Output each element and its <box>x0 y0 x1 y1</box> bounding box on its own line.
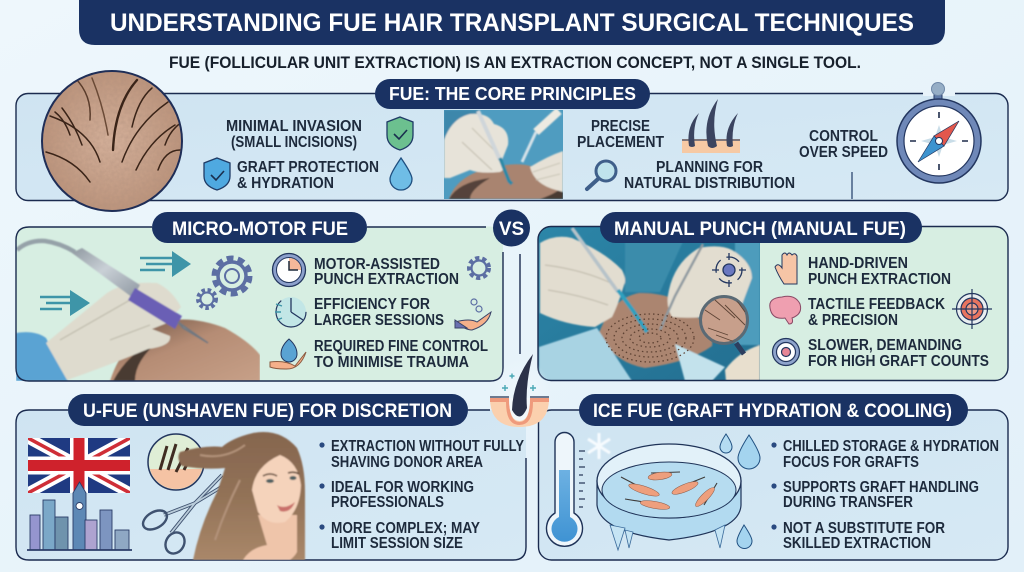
icon: green shield <box>387 117 413 150</box>
heading pill: U-FUE <box>68 394 468 426</box>
icon: magnifier on scalp <box>700 296 748 354</box>
icon: central hair follicle <box>490 354 552 431</box>
text: efficiency: LARGER SESSIONS <box>314 312 444 329</box>
panel: FUE core principles <box>16 71 1008 211</box>
heading pill: manual punch <box>600 212 922 243</box>
gap for stopwatch crown <box>923 91 955 96</box>
icon: large water drop <box>738 435 760 469</box>
text: precise placement: PRECISE <box>591 118 650 135</box>
versus badge: VS <box>499 219 524 240</box>
text list: U-FUE benefits <box>319 438 525 552</box>
icon: brain <box>770 296 801 324</box>
icon: thermometer <box>546 433 585 546</box>
panel: micro-motor FUE <box>16 212 503 381</box>
photo: micro-motor handpiece in gloved hand <box>16 241 260 381</box>
icon: blue shield <box>204 158 230 190</box>
icon: petri dish with grafts <box>597 444 741 550</box>
text: graft protection: GRAFT PROTECTION <box>237 159 379 176</box>
text: precise placement <box>577 118 664 151</box>
heading pill: manual punch: MANUAL PUNCH (MANUAL FUE) <box>614 219 906 240</box>
text list: ICE FUE notes: NOT A SUBSTITUTE FOR <box>783 520 945 537</box>
versus badge <box>493 210 530 246</box>
icon: UK flag <box>28 438 130 493</box>
text: tactile feedback <box>808 296 946 329</box>
icon: magnifying glass <box>587 161 616 189</box>
icon: small gear right <box>470 258 488 278</box>
text: control over speed: CONTROL <box>809 128 878 145</box>
title banner <box>79 0 945 45</box>
text: fine control <box>314 338 488 371</box>
title banner: UNDERSTANDING FUE HAIR TRANSPLANT SURGICAL TECHNIQUES <box>110 9 914 37</box>
icon: scissors <box>140 475 228 557</box>
subtitle: FUE (FOLLICULAR UNIT EXTRACTION) IS AN EXTRACTION CONCEPT, NOT A SINGLE TOOL. <box>169 53 861 72</box>
icon: water drop <box>390 158 412 190</box>
text list: U-FUE benefits: MORE COMPLEX; MAY <box>331 520 481 537</box>
text: motor-assisted <box>314 256 459 288</box>
text: hand-driven: PUNCH EXTRACTION <box>808 271 951 288</box>
icon: city skyline <box>27 482 132 550</box>
panel: U-FUE <box>16 394 526 560</box>
photo: woman with long hair <box>178 432 305 560</box>
arrow: upper speed arrow <box>140 251 191 277</box>
text list: ICE FUE notes: DURING TRANSFER <box>783 494 913 511</box>
text: precise placement: PLACEMENT <box>577 134 664 151</box>
text: hand-driven: HAND-DRIVEN <box>808 255 908 272</box>
text: graft protection: & HYDRATION <box>237 175 334 192</box>
text: slower: SLOWER, DEMANDING <box>808 337 962 354</box>
text: minimal invasion: (SMALL INCISIONS) <box>231 134 357 151</box>
text: tactile feedback: & PRECISION <box>808 312 898 329</box>
icon: raised hand <box>775 253 797 284</box>
icon: lower water drop <box>737 525 752 549</box>
arrow: lower speed arrow <box>40 290 90 316</box>
icon: snowflake <box>588 433 610 459</box>
photo: extraction on scalp <box>444 110 563 199</box>
icon: small gear <box>198 290 216 308</box>
panel: ICE FUE <box>538 394 1008 560</box>
icon: crosshair on photo <box>712 253 746 287</box>
heading pill: ICE FUE: ICE FUE (GRAFT HYDRATION & COOLING) <box>593 401 952 422</box>
heading pill: micro-motor <box>152 212 367 243</box>
heading pill: U-FUE: U-FUE (UNSHAVEN FUE) FOR DISCRETION <box>83 401 452 422</box>
panel: manual punch <box>538 212 1008 381</box>
photo: scalp close-up <box>42 71 182 211</box>
stippled donor hair on scalp <box>606 314 694 362</box>
text list: U-FUE benefits: PROFESSIONALS <box>331 494 444 511</box>
icon: hand with drop <box>270 339 306 369</box>
text: minimal invasion: MINIMAL INVASION <box>226 118 362 135</box>
text: minimal invasion <box>226 118 362 151</box>
text list: U-FUE benefits: LIMIT SESSION SIZE <box>331 535 463 552</box>
text: slower: FOR HIGH GRAFT COUNTS <box>808 353 989 370</box>
text list: ICE FUE notes: SKILLED EXTRACTION <box>783 535 931 552</box>
text: graft protection <box>237 159 379 192</box>
text: planning: NATURAL DISTRIBUTION <box>624 175 795 192</box>
text: hand-driven <box>808 255 951 288</box>
text: control over speed <box>799 128 888 161</box>
text: motor-assisted: MOTOR-ASSISTED <box>314 256 440 273</box>
heading pill: core principles <box>375 79 650 109</box>
text list: U-FUE benefits: EXTRACTION WITHOUT FULLY <box>331 438 525 455</box>
text list: ICE FUE notes: FOCUS FOR GRAFTS <box>783 454 919 471</box>
text: control over speed: OVER SPEED <box>799 144 888 161</box>
icon: hand with grafts <box>455 299 491 330</box>
heading pill: micro-motor: MICRO-MOTOR FUE <box>172 219 348 240</box>
icon: timer <box>275 297 306 327</box>
icon: target <box>952 289 992 329</box>
heading pill: core principles: FUE: THE CORE PRINCIPLES <box>389 84 636 104</box>
text list: ICE FUE notes <box>771 438 999 552</box>
text: tactile feedback: TACTILE FEEDBACK <box>808 296 946 313</box>
icon: concentric circle <box>772 338 800 366</box>
text list: U-FUE benefits: IDEAL FOR WORKING <box>331 479 474 496</box>
text list: U-FUE benefits: SHAVING DONOR AREA <box>331 454 483 471</box>
text: motor-assisted: PUNCH EXTRACTION <box>314 271 459 288</box>
text: slower <box>808 337 989 370</box>
text: efficiency: EFFICIENCY FOR <box>314 296 430 313</box>
icon: clock <box>272 254 306 286</box>
text: planning <box>624 159 795 192</box>
icon: hair inset circle <box>148 434 205 493</box>
text list: ICE FUE notes: SUPPORTS GRAFT HANDLING <box>783 479 979 496</box>
text: planning: PLANNING FOR <box>656 159 763 176</box>
icon: small water drop <box>720 434 732 453</box>
text: efficiency <box>314 296 444 329</box>
photo: manual punch surgery <box>538 226 760 381</box>
icon: stopwatch compass <box>897 82 981 183</box>
icon: large gear <box>215 259 249 293</box>
text: fine control: REQUIRED FINE CONTROL <box>314 338 488 355</box>
heading pill: ICE FUE <box>579 394 968 426</box>
icon: hair follicles <box>682 99 740 153</box>
text: fine control: TO MINIMISE TRAUMA <box>314 354 469 371</box>
